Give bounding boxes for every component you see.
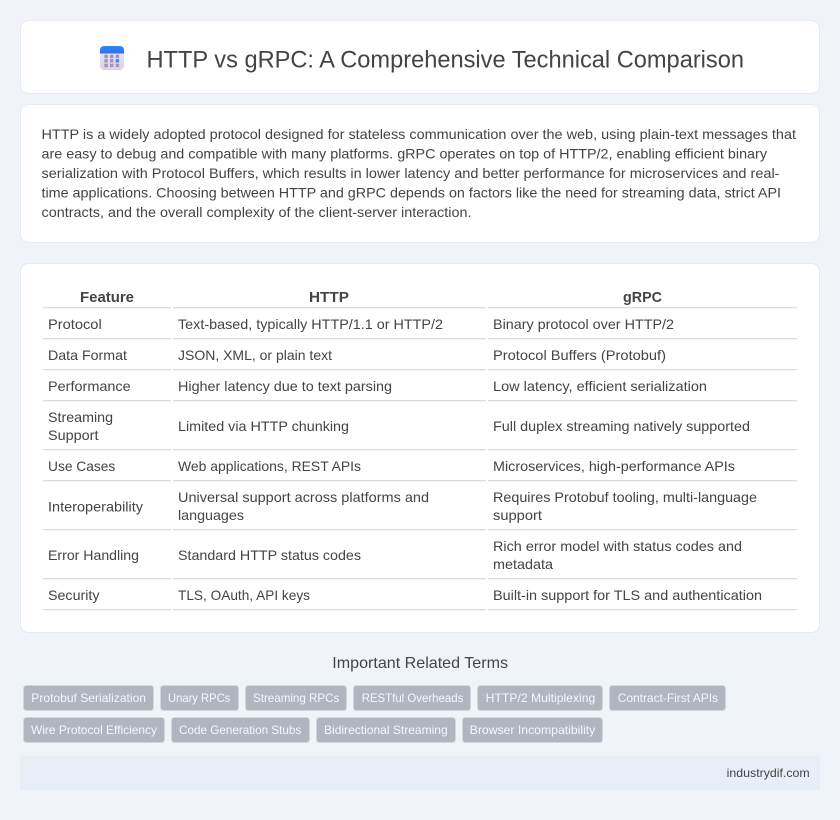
panel: comparison table <box>20 264 820 632</box>
table row: Streaming Support <box>43 409 797 450</box>
tag: RESTful Overheads: RESTful Overheads <box>362 691 463 705</box>
table row: Data Format: Protocol Buffers (Protobuf) <box>493 347 666 363</box>
table row: Security: TLS, OAuth, API keys <box>178 587 310 603</box>
table header row: gRPC <box>623 289 662 306</box>
tag: Contract-First APIs <box>610 686 726 710</box>
table row: Performance: Low latency, efficient serialization <box>493 378 707 394</box>
tag: Contract-First APIs: Contract-First APIs <box>618 691 718 705</box>
table row: Error Handling: Error Handling <box>48 547 139 563</box>
panel: related term tags <box>24 686 726 742</box>
table row: Data Format <box>43 347 797 370</box>
table row: Error Handling <box>43 538 797 579</box>
panel: description <box>20 104 820 242</box>
tag: Wire Protocol Efficiency: Wire Protocol Efficiency <box>31 723 157 737</box>
tag: Unary RPCs: Unary RPCs <box>168 691 230 705</box>
tag: HTTP/2 Multiplexing <box>478 686 602 710</box>
table row: Data Format: Data Format <box>48 347 127 363</box>
text block: description paragraph: HTTP is a widely adopted protocol designed for stateless communication over the web, using plain-text messages that <box>42 126 796 142</box>
table row: Protocol: Binary protocol over HTTP/2 <box>493 316 674 332</box>
tag: Streaming RPCs: Streaming RPCs <box>253 691 339 705</box>
table row: Performance: Higher latency due to text parsing <box>178 378 392 394</box>
tag: Wire Protocol Efficiency <box>24 718 164 742</box>
table row: Error Handling: Rich error model with status codes and <box>493 538 742 554</box>
table header row: Feature <box>80 289 134 306</box>
tag: Protobuf Serialization: Protobuf Serialization <box>31 691 146 705</box>
table row: Data Format: JSON, XML, or plain text <box>178 347 332 363</box>
tag: Browser Incompatibility: Browser Incompatibility <box>470 723 595 737</box>
table row: Interoperability: Interoperability <box>48 498 143 514</box>
table row: Security: Built-in support for TLS and authentication <box>493 587 762 603</box>
title: HTTP vs gRPC: A Comprehensive Technical Comparison <box>146 46 744 74</box>
table row: Security: Security <box>48 587 100 603</box>
table row: Streaming Support: Limited via HTTP chunking <box>178 418 349 434</box>
table row: Use Cases: Web applications, REST APIs <box>178 458 361 474</box>
table row: Interoperability: Universal support across platforms and <box>178 489 429 505</box>
table row: Performance: Performance <box>48 378 131 394</box>
tag: HTTP/2 Multiplexing: HTTP/2 Multiplexing <box>486 691 595 705</box>
tag: Bidirectional Streaming: Bidirectional Streaming <box>324 723 448 737</box>
text block: description paragraph: are easy to debug and compatible with many platforms. gRPC operates on top of HTTP/2, enabling efficient binary <box>42 146 767 162</box>
icon: calendar grid <box>100 46 124 70</box>
table row: Error Handling: metadata <box>493 556 553 572</box>
table row: Security <box>43 587 797 610</box>
table row: Interoperability: Requires Protobuf tooling, multi-language <box>493 489 757 505</box>
text block: description paragraph <box>42 126 796 220</box>
table row: Interoperability: languages <box>178 507 244 523</box>
heading: related terms: Important Related Terms <box>332 655 508 672</box>
table row: Use Cases <box>43 458 797 481</box>
table row: Use Cases: Microservices, high-performance APIs <box>493 458 735 474</box>
table row: Protocol: Protocol <box>48 316 102 332</box>
tag: Bidirectional Streaming <box>316 718 456 742</box>
table header row <box>43 289 797 308</box>
table row: Error Handling: Standard HTTP status codes <box>178 547 361 563</box>
footer source text: industrydif.com <box>727 766 810 780</box>
tag: Browser Incompatibility <box>462 718 602 742</box>
tag: Unary RPCs <box>160 686 238 710</box>
table row: Streaming Support: Full duplex streaming natively supported <box>493 418 750 434</box>
tag: Code Generation Stubs <box>172 718 310 742</box>
footer bar <box>20 756 820 790</box>
tag: Streaming RPCs <box>246 686 346 710</box>
text block: description paragraph: serialization with Protocol Buffers, which results in lower latency and better performance for microservices and real- <box>42 165 780 181</box>
table row: Streaming Support: Streaming <box>48 409 113 425</box>
table row: Use Cases: Use Cases <box>48 458 115 474</box>
text block: description paragraph: contracts, and the overall complexity of the client-server interaction. <box>42 204 472 220</box>
text block: description paragraph: time applications. Choosing between HTTP and gRPC depends on factors like the need for streaming data, strict API <box>42 184 781 200</box>
tag: Code Generation Stubs: Code Generation Stubs <box>179 723 301 737</box>
table row: Protocol: Text-based, typically HTTP/1.1 or HTTP/2 <box>178 316 443 332</box>
tag: RESTful Overheads <box>354 686 470 710</box>
table header row: HTTP <box>309 289 349 306</box>
table row: Interoperability <box>43 489 797 530</box>
table row: Streaming Support: Support <box>48 427 99 443</box>
table row: Protocol <box>43 316 797 339</box>
table row: Interoperability: support <box>493 507 542 523</box>
table row: Performance <box>43 378 797 401</box>
panel: header <box>20 20 820 94</box>
tag: Protobuf Serialization <box>24 686 154 710</box>
